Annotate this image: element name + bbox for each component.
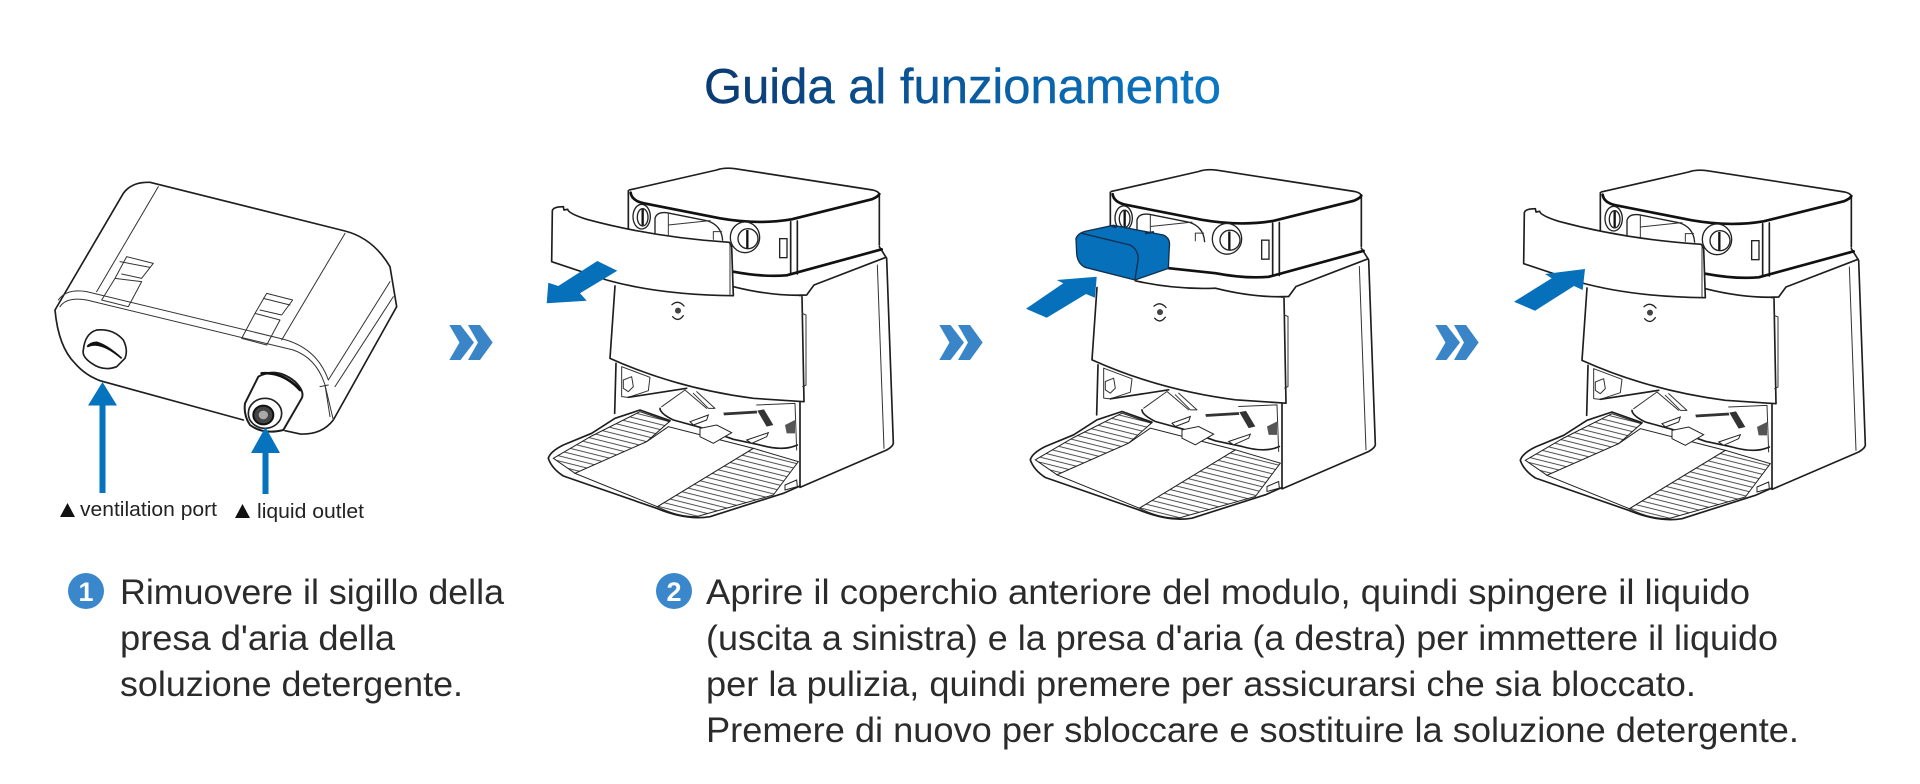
arrow: pull cover out — [547, 261, 617, 303]
arrow: chevrons 3 — [1435, 325, 1479, 360]
label: liquid outlet: liquid outlet — [257, 500, 364, 523]
text block: step 1 — [68, 573, 505, 704]
step 1 text — [120, 573, 505, 704]
step 2 text: per la pulizia, quindi premere per assicurarsi che sia bloccato. — [706, 665, 1696, 704]
illustration: docking station — [548, 168, 893, 518]
illustration: front cover — [1524, 209, 1705, 298]
icon: blue cartridge — [1076, 225, 1170, 280]
arrow: push cover in — [1514, 269, 1585, 311]
panel: station with cartridge being inserted — [1026, 170, 1375, 519]
step 2 text: Premere di nuovo per sbloccare e sostituire la soluzione detergente. — [706, 711, 1799, 750]
step 1 text: soluzione detergente. — [120, 665, 463, 704]
illustration: open front cover — [552, 207, 733, 296]
panel: cleaning solution cartridge — [55, 182, 397, 523]
illustration: docking station — [1520, 170, 1865, 520]
step 1 text: Rimuovere il sigillo della — [120, 573, 505, 612]
panel: station with cover closing — [1514, 170, 1865, 520]
text block: step 2 — [656, 573, 1799, 750]
step 2 text: Aprire il coperchio anteriore del modulo, quindi spingere il liquido — [706, 573, 1750, 612]
label: ventilation port: ventilation port — [80, 498, 217, 521]
step 2 text — [706, 573, 1799, 750]
icon: number badge 2 — [656, 573, 692, 609]
icon: number badge 1: 1 — [78, 577, 94, 607]
icon: number badge 2: 2 — [666, 577, 682, 607]
arrow: push cartridge in — [1026, 277, 1097, 318]
arrow: liquid outlet — [251, 427, 280, 494]
title: Guida al funzionamento — [704, 60, 1221, 114]
arrow: chevrons 1 — [449, 325, 493, 360]
arrow: ventilation port — [88, 382, 117, 493]
panel: station with open cover — [547, 168, 893, 518]
arrow: chevrons 2 — [939, 325, 983, 360]
illustration: docking station — [1030, 170, 1375, 519]
step 2 text: (uscita a sinistra) e la presa d'aria (a destra) per immettere il liquido — [706, 619, 1778, 658]
step 1 text: presa d'aria della — [120, 619, 396, 658]
icon: cartridge line drawing — [55, 182, 397, 434]
icon: number badge 1 — [68, 573, 104, 609]
